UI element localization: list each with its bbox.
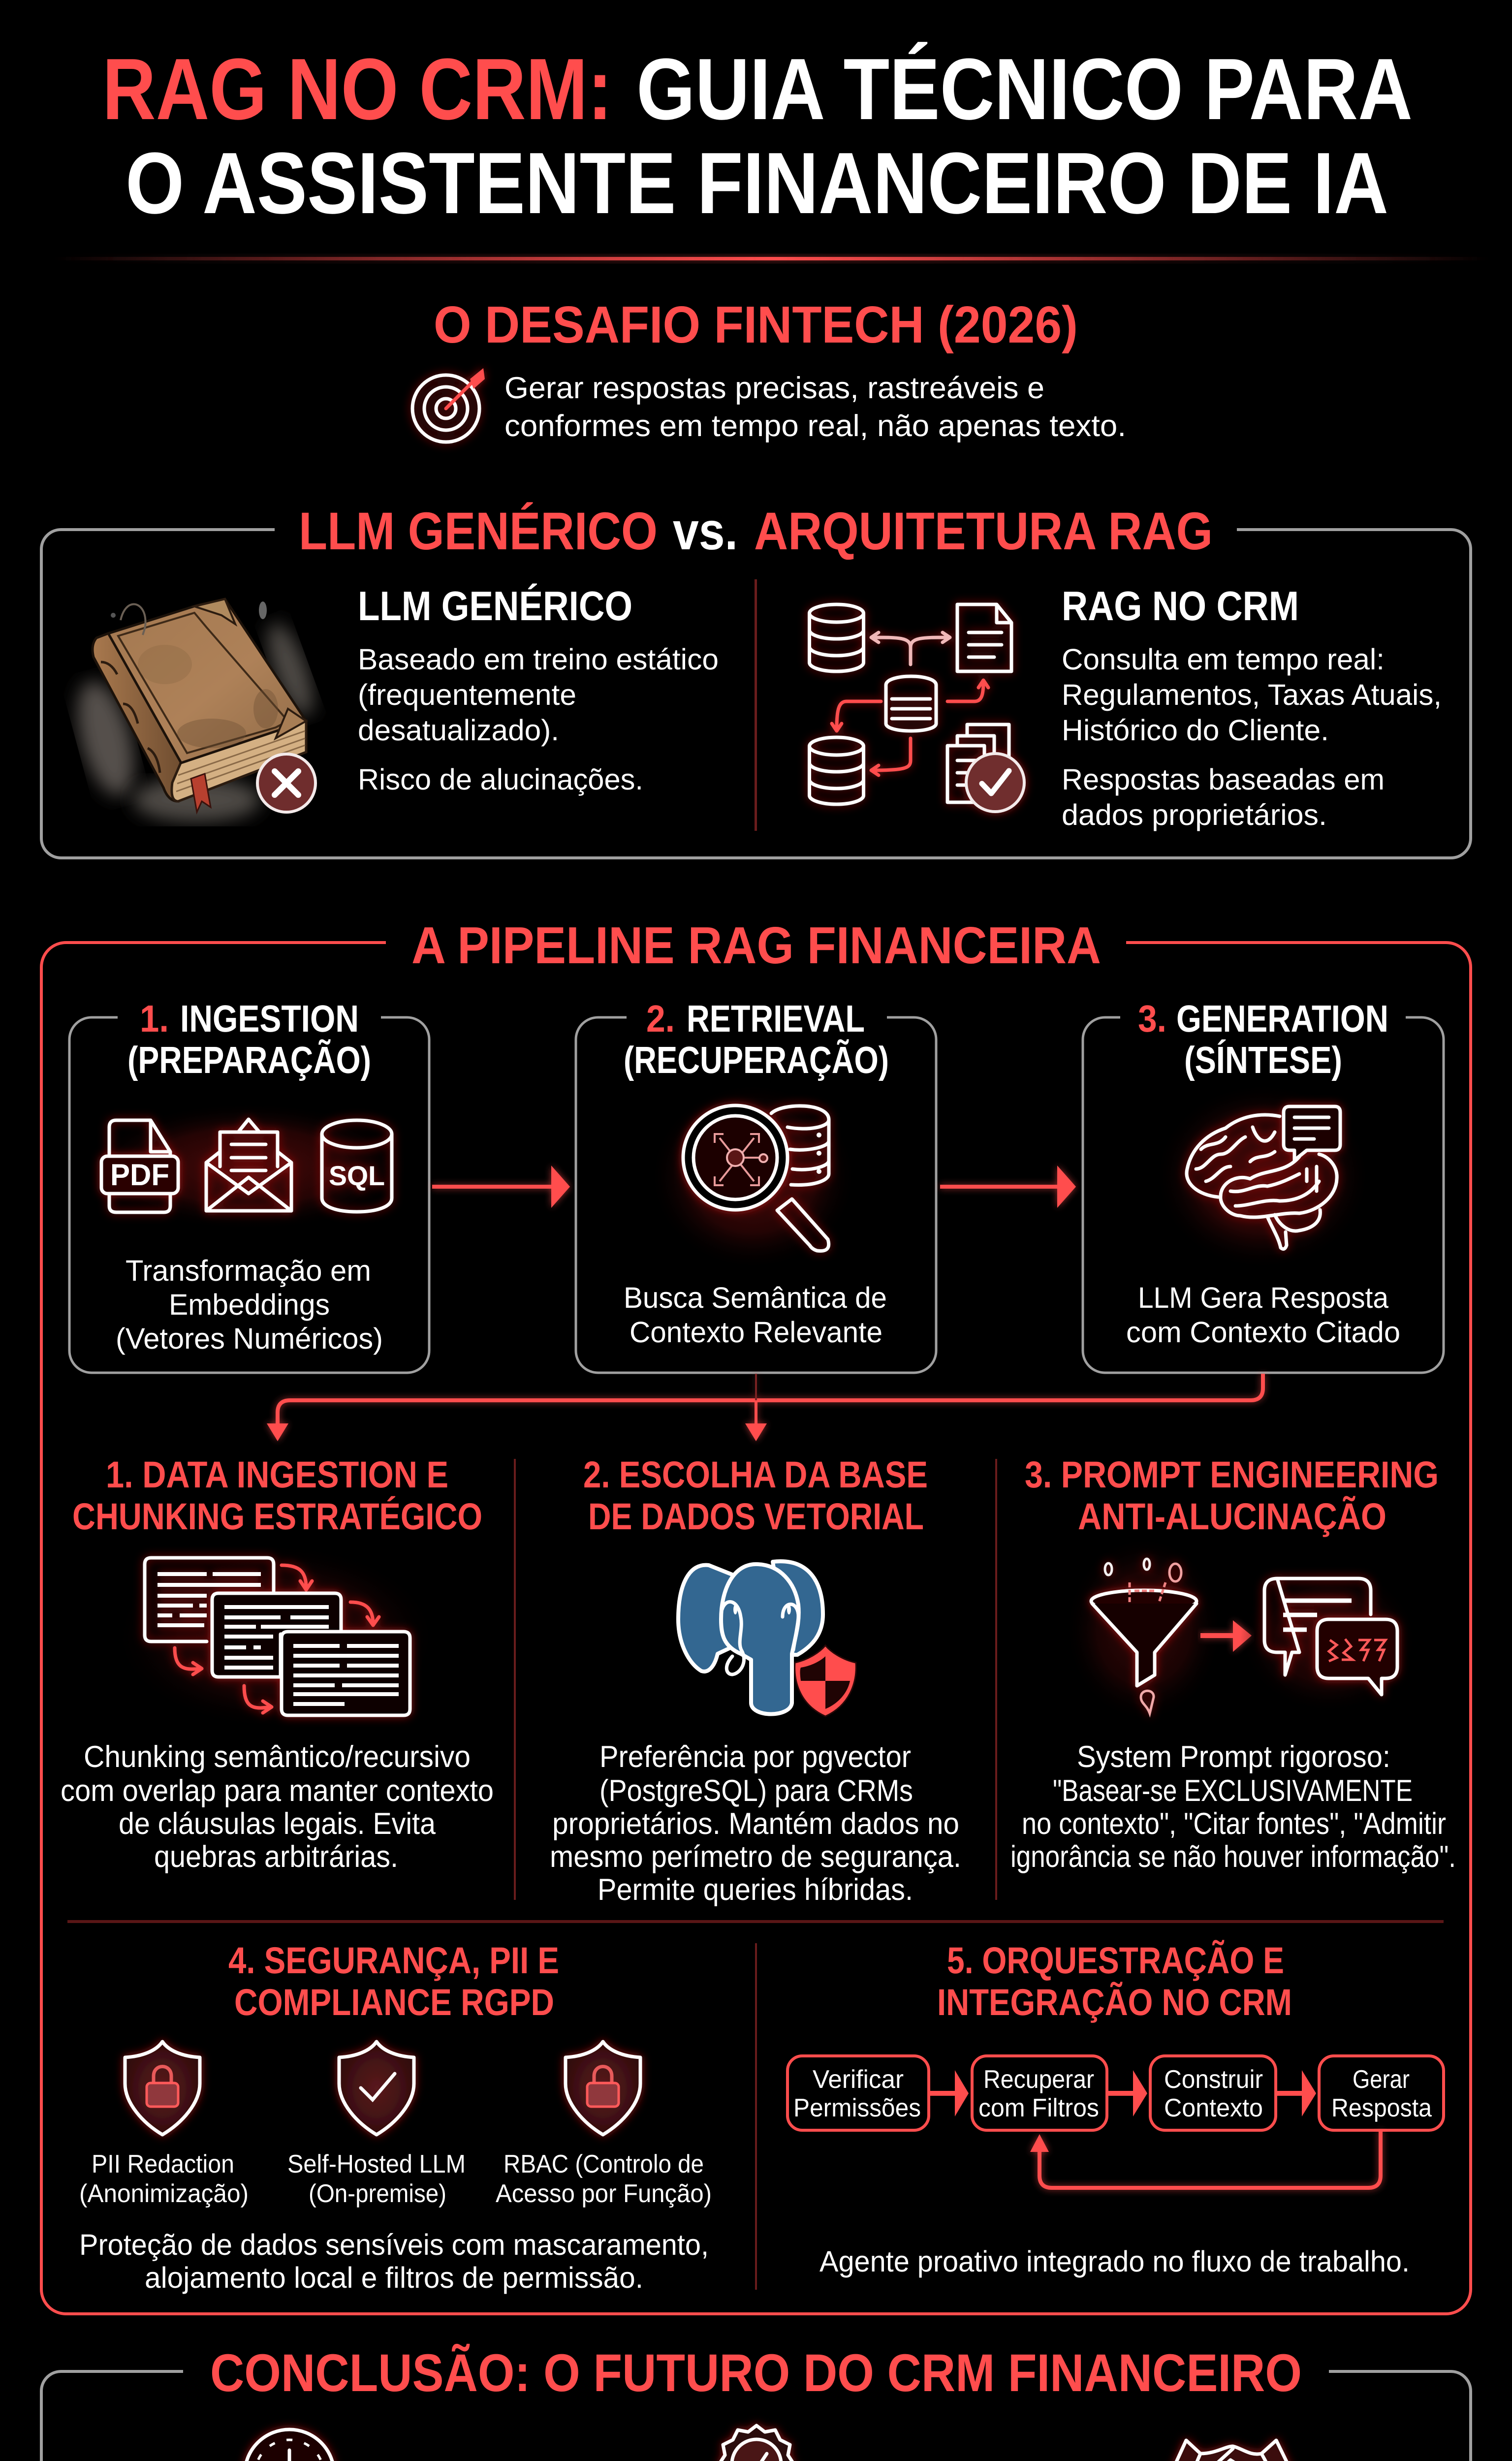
text: section 1: quebras arbitrárias. — [154, 1840, 398, 1874]
text: RAG no CRM: Respostas baseadas em — [1062, 763, 1385, 796]
text: RAG no CRM: dados proprietários. — [1062, 798, 1327, 831]
text: section 1: de cláusulas legais. Evita — [119, 1807, 436, 1841]
box: ingestion — [69, 998, 429, 1373]
text: section 1: com overlap para manter contexto — [61, 1774, 494, 1808]
box: generation — [1083, 998, 1444, 1373]
section 2: vector database — [550, 1454, 961, 1907]
text: LLM genérico — [358, 583, 719, 796]
text: retrieval: Busca Semântica de — [624, 1281, 887, 1314]
icon: magnifier over database — [683, 1105, 829, 1251]
text: section 4: alojamento local e filtros de permissão. — [145, 2261, 643, 2294]
heading: comparison: LLM GENÉRICO — [299, 501, 658, 561]
icon: rosette — [720, 2426, 793, 2461]
heading: section 4: 4. SEGURANÇA, PII E — [228, 1940, 559, 1982]
heading: section 1: CHUNKING ESTRATÉGICO — [72, 1496, 482, 1538]
text: section 2: mesmo perímetro de segurança. — [550, 1840, 961, 1874]
labels: security features — [79, 2150, 712, 2208]
text: section 3 — [1010, 1740, 1456, 1874]
text: LLM genérico: Baseado em treino estático — [358, 643, 719, 676]
icon: x badge — [257, 754, 315, 812]
flow step: construir: Contexto — [1164, 2094, 1263, 2122]
arrow: step 1 to 2 — [929, 2070, 969, 2116]
flow step: recuperar — [972, 2056, 1107, 2130]
heading: generation — [1138, 998, 1388, 1081]
heading: retrieval: 2. — [646, 998, 675, 1040]
heading: section 4 — [228, 1940, 559, 2023]
panel: pipeline RAG financeira — [41, 916, 1471, 2314]
text: section 1: Chunking semântico/recursivo — [84, 1740, 471, 1774]
section 1: data ingestion — [61, 1454, 494, 1874]
text: desafio: conformes em tempo real, não apenas texto. — [504, 409, 1126, 443]
text: RAG no CRM — [1062, 583, 1442, 831]
heading: section 5 — [937, 1940, 1292, 2023]
panel: LLM vs RAG — [41, 501, 1471, 858]
icon: target — [412, 368, 485, 442]
icon: sql cylinder: SQL — [329, 1160, 385, 1191]
icon: overlapping documents — [145, 1558, 410, 1715]
text: LLM genérico: Risco de alucinações. — [358, 763, 643, 796]
icon: shield RBAC — [566, 2042, 640, 2135]
labels: security features: (Anonimização) — [79, 2179, 249, 2208]
flow step: verificar: Verificar — [813, 2065, 904, 2094]
heading: ingestion: (PREPARAÇÃO) — [127, 1039, 371, 1081]
heading: comparison: vs. — [673, 501, 738, 561]
icon: funnel — [1091, 1559, 1197, 1713]
flow step: gerar: Resposta — [1331, 2094, 1432, 2122]
heading: section 5: 5. ORQUESTRAÇÃO E — [947, 1940, 1284, 1982]
text: RAG no CRM: RAG NO CRM — [1062, 583, 1299, 629]
text: generation: com Contexto Citado — [1126, 1316, 1400, 1349]
labels: security features: Self-Hosted LLM — [287, 2150, 466, 2178]
arrow: retrieval to generation — [940, 1166, 1076, 1208]
text: section 2 — [550, 1740, 961, 1907]
text: section 2: Preferência por pgvector — [599, 1740, 911, 1774]
heading: conclusão: CONCLUSÃO: O FUTURO DO CRM FINANCEIRO — [210, 2343, 1302, 2402]
text: desafio — [504, 371, 1126, 443]
arrow: connector to sections — [267, 1374, 1263, 1441]
text: retrieval: Contexto Relevante — [630, 1316, 882, 1349]
heading: section 4: COMPLIANCE RGPD — [234, 1982, 554, 2023]
flow step: gerar: Gerar — [1353, 2065, 1410, 2094]
text: section 4 — [79, 2228, 709, 2294]
title — [102, 40, 1413, 232]
flow step: construir: Construir — [1164, 2065, 1263, 2094]
icon: brain with chat bubble — [1187, 1106, 1340, 1249]
panel: conclusão — [41, 2343, 1471, 2461]
section 5: orchestration — [788, 1940, 1444, 2278]
title: GUIA TÉCNICO PARA — [636, 40, 1413, 138]
title: RAG NO CRM: — [102, 40, 612, 138]
labels: security features: RBAC (Controlo de — [504, 2150, 704, 2178]
labels: security features: PII Redaction — [92, 2150, 234, 2178]
text: LLM genérico: desatualizado). — [358, 714, 559, 747]
arrow: step 3 to 4 — [1276, 2070, 1316, 2116]
heading: section 2: 2. ESCOLHA DA BASE — [583, 1454, 928, 1496]
heading: retrieval — [624, 998, 889, 1081]
heading: ingestion: INGESTION — [180, 998, 359, 1040]
flow step: gerar — [1319, 2056, 1444, 2130]
icon: RAG data network — [809, 604, 1024, 812]
flow step: recuperar: com Filtros — [978, 2094, 1099, 2122]
text: section 2: (PostgreSQL) para CRMs — [599, 1774, 913, 1808]
text: section 3: System Prompt rigoroso: — [1077, 1740, 1390, 1774]
section: desafio fintech — [412, 296, 1126, 443]
heading: section 3: 3. PROMPT ENGINEERING — [1025, 1454, 1439, 1496]
heading: pipeline: A PIPELINE RAG FINANCEIRA — [411, 916, 1101, 975]
heading: section 2: DE DADOS VETORIAL — [588, 1496, 924, 1538]
heading: ingestion: 1. — [140, 998, 169, 1040]
heading: section 2 — [583, 1454, 928, 1538]
text: LLM genérico: LLM GENÉRICO — [358, 583, 632, 629]
icon: clock — [245, 2429, 334, 2461]
text: ingestion: Embeddings — [169, 1288, 330, 1321]
icon: pdf: PDF — [110, 1158, 169, 1192]
box: retrieval — [576, 998, 936, 1373]
text: RAG no CRM: Consulta em tempo real: — [1062, 643, 1385, 676]
section 4: security — [79, 1940, 712, 2294]
heading: comparison: ARQUITETURA RAG — [754, 501, 1213, 561]
flow step: construir — [1150, 2056, 1276, 2130]
text: section 3: "Basear-se EXCLUSIVAMENTE — [1053, 1774, 1413, 1808]
labels: security features: Acesso por Função) — [496, 2179, 712, 2208]
text: RAG no CRM: Histórico do Cliente. — [1062, 714, 1329, 747]
text: ingestion: (Vetores Numéricos) — [116, 1322, 383, 1355]
text: ingestion — [116, 1254, 383, 1355]
icon: shield PII — [125, 2042, 200, 2135]
text: retrieval — [624, 1281, 887, 1349]
icon: red shield — [795, 1645, 856, 1716]
arrow: feedback loop — [1030, 2130, 1381, 2188]
flow diagram — [788, 2056, 1444, 2188]
text: section 1 — [61, 1740, 494, 1874]
text: ingestion: Transformação em — [126, 1254, 371, 1287]
heading: section 3: ANTI-ALUCINAÇÃO — [1078, 1496, 1386, 1538]
icon: envelope — [206, 1119, 291, 1211]
heading: retrieval: (RECUPERAÇÃO) — [624, 1039, 889, 1081]
icon: shield self-hosted — [339, 2042, 414, 2135]
text: section 2: proprietários. Mantém dados no — [552, 1807, 959, 1841]
text: RAG no CRM: Regulamentos, Taxas Atuais, — [1062, 678, 1442, 711]
text: desafio: Gerar respostas precisas, rastreáveis e — [504, 371, 1044, 405]
labels: security features: (On-premise) — [309, 2179, 446, 2208]
text: section 2: Permite queries híbridas. — [598, 1873, 913, 1907]
section 3: prompt engineering — [1010, 1454, 1456, 1874]
heading: comparison — [299, 501, 1213, 561]
heading: ingestion — [127, 998, 371, 1081]
arrow: funnel to chat — [1200, 1620, 1252, 1652]
icon: postgres elephant with shield — [678, 1561, 856, 1716]
icon: handshake — [1170, 2440, 1293, 2461]
heading: desafio: O DESAFIO FINTECH (2026) — [434, 296, 1078, 354]
arrow: ingestion to retrieval — [432, 1166, 570, 1208]
heading: section 5: INTEGRAÇÃO NO CRM — [937, 1982, 1292, 2023]
text: LLM genérico: (frequentemente — [358, 678, 576, 711]
text: generation: LLM Gera Resposta — [1138, 1281, 1389, 1314]
icon: chat bubbles — [1264, 1578, 1397, 1695]
heading: section 1: 1. DATA INGESTION E — [106, 1454, 448, 1496]
icon: pdf — [101, 1120, 178, 1212]
text: section 5: Agente proativo integrado no fluxo de trabalho. — [819, 2245, 1410, 2278]
heading: generation: GENERATION — [1176, 998, 1388, 1040]
heading: section 1 — [72, 1454, 482, 1538]
heading: generation: (SÍNTESE) — [1184, 1039, 1342, 1081]
text: section 4: Proteção de dados sensíveis com mascaramento, — [79, 2228, 709, 2261]
icon: sql cylinder — [322, 1120, 392, 1212]
flow step: verificar: Permissões — [793, 2094, 921, 2122]
text: section 3: no contexto", "Citar fontes", "Admitir — [1022, 1807, 1446, 1841]
flow step: recuperar: Recuperar — [983, 2065, 1094, 2094]
arrow: step 2 to 3 — [1107, 2070, 1147, 2116]
text: generation — [1126, 1281, 1400, 1349]
flow step: verificar — [788, 2056, 929, 2130]
icon: old book — [67, 599, 322, 822]
heading: section 3 — [1025, 1454, 1439, 1538]
heading: generation: 3. — [1138, 998, 1166, 1040]
heading: retrieval: RETRIEVAL — [687, 998, 865, 1040]
